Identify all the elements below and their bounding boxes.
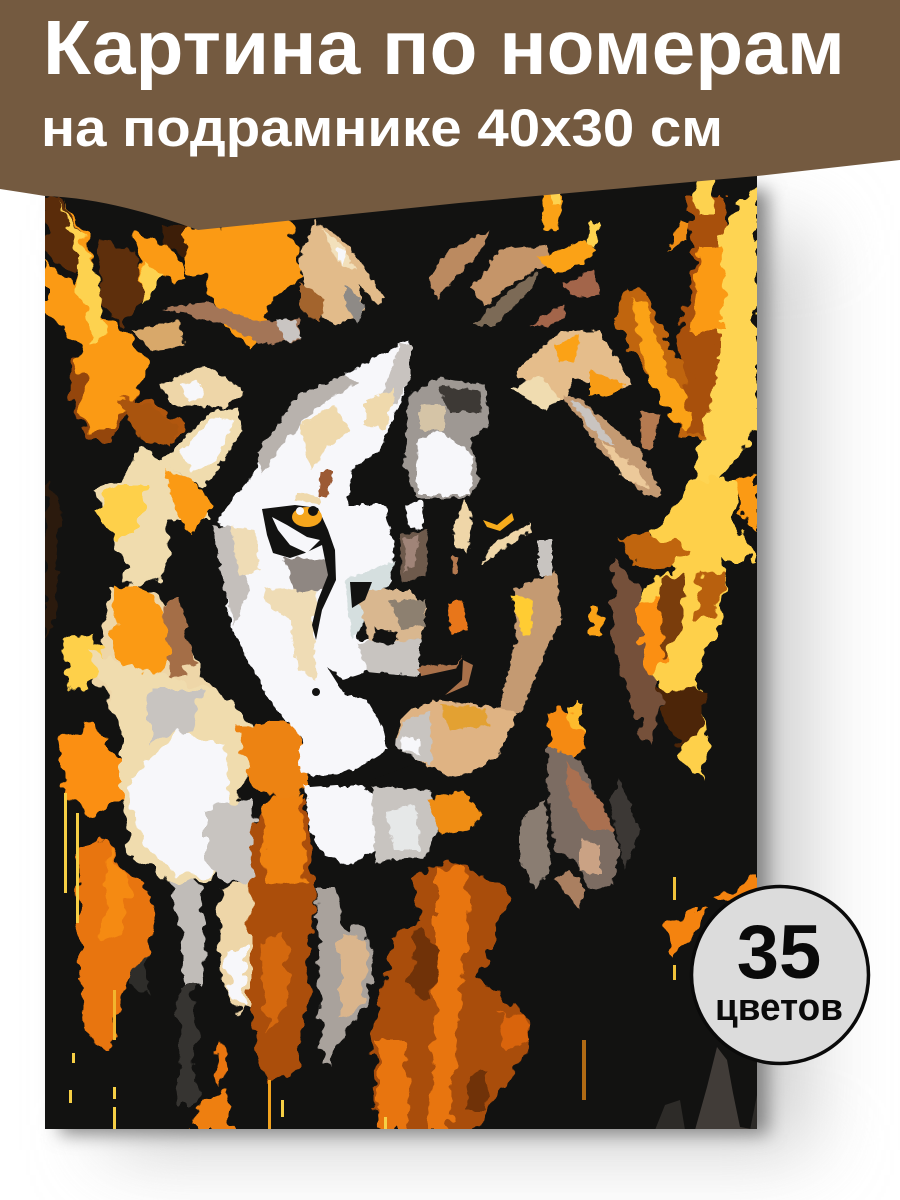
mane: right strands xyxy=(512,330,662,910)
title: Картина по номерам xyxy=(43,5,845,91)
canvas shadow xyxy=(60,190,810,1150)
lion face: white left side xyxy=(212,340,482,865)
fire: upper left splashes xyxy=(45,195,302,640)
mane: left side with fire xyxy=(60,480,375,1130)
fire: right column xyxy=(547,178,757,960)
mane: upper right strands xyxy=(428,185,690,328)
paint drips xyxy=(64,793,757,1130)
lion left eye xyxy=(262,505,336,640)
fire: lower centre xyxy=(372,863,532,1130)
header banner xyxy=(0,0,900,230)
lion nose and mouth xyxy=(307,582,473,787)
badge: 35 colours xyxy=(692,886,868,1064)
mane: upper left strands xyxy=(118,221,385,535)
lion face: dark side, cheek and muzzle xyxy=(395,378,562,777)
badge: 35 colours: 35 xyxy=(737,910,821,995)
badge: 35 colours: цветов xyxy=(715,987,843,1029)
subtitle: на подрамнике 40х30 см xyxy=(41,99,723,158)
lion right eye xyxy=(483,513,514,531)
painting: lion on black with orange fire xyxy=(45,170,757,1130)
